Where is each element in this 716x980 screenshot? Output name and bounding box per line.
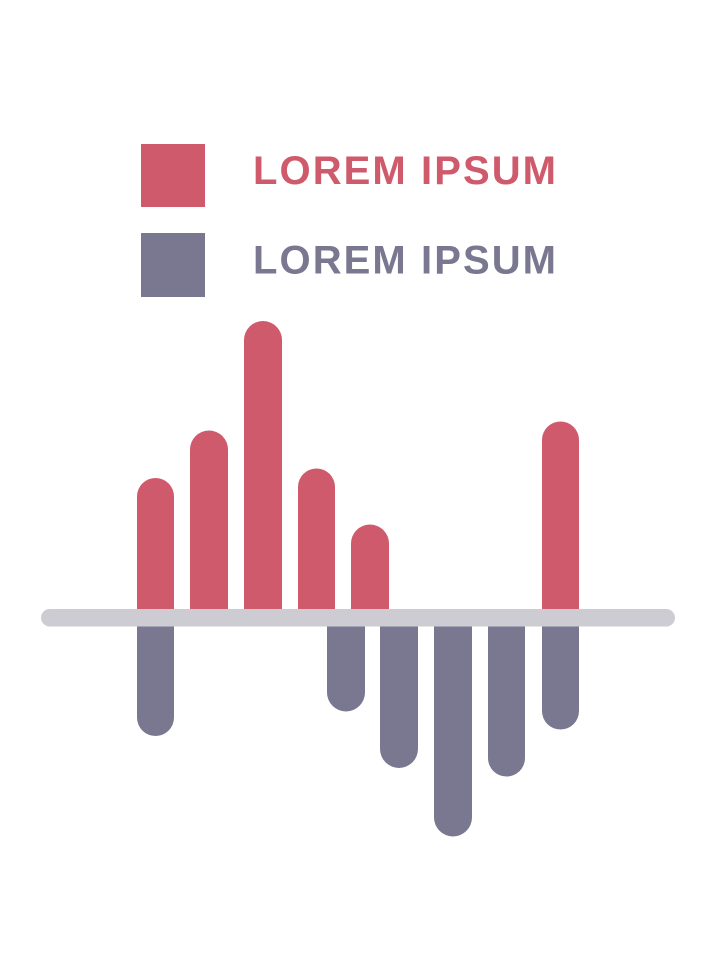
legend swatch: red bbox=[141, 144, 205, 207]
legend bbox=[141, 144, 556, 297]
lower grey bars bbox=[137, 624, 579, 837]
upper red bars bbox=[137, 321, 579, 612]
legend swatch: grey bbox=[141, 233, 205, 297]
bar chart bbox=[41, 321, 675, 837]
legend label: grey: LOREM IPSUM bbox=[253, 238, 556, 282]
horizontal axis bbox=[41, 609, 675, 626]
legend label: red: LOREM IPSUM bbox=[253, 149, 556, 193]
